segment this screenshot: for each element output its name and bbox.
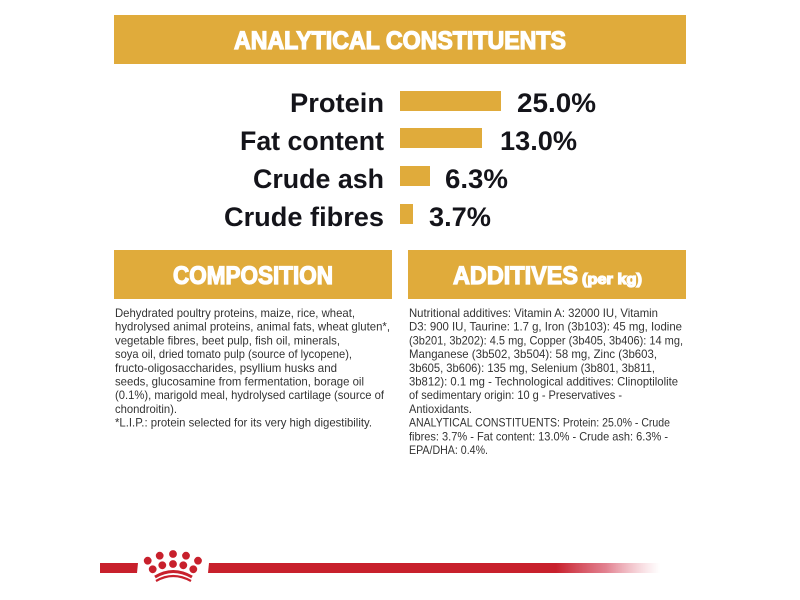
panel: analytical constituents header	[114, 15, 686, 64]
text block: composition: *L.I.P.: protein selected for its very high digestibility.	[115, 417, 372, 430]
icon: royal canin crown logo	[144, 550, 202, 581]
text block: composition: (0.1%), marigold meal, hydrolysed cartilage (source of	[115, 389, 385, 402]
text block: additives: Nutritional additives: Vitamin A: 32000 IU, Vitamin	[409, 307, 658, 320]
text block: additives: Manganese (3b502, 3b504): 58 mg, Zinc (3b603,	[409, 348, 657, 361]
panel: additives header: (per kg)	[582, 271, 642, 288]
panel: additives header	[408, 250, 686, 299]
panel: additives header: ADDITIVES	[453, 262, 578, 290]
panel: composition header	[114, 250, 392, 299]
row: protein: Protein	[290, 88, 384, 118]
row: crude ash	[253, 164, 508, 194]
text block: composition: soya oil, dried tomato pulp (source of lycopene),	[115, 348, 352, 361]
row: crude ash: 6.3%	[445, 164, 508, 194]
text block: additives: fibres: 3.7% - Fat content: 13.0% - Crude ash: 6.3% -	[409, 430, 668, 443]
text block: additives: ANALYTICAL CONSTITUENTS: Protein: 25.0% - Crude	[409, 417, 670, 430]
text block: composition: seeds, glucosamine from fermentation, borage oil	[115, 376, 364, 388]
text block: additives: Antioxidants.	[409, 403, 472, 416]
text block: composition: vegetable fibres, beet pulp, fish oil, minerals,	[115, 334, 340, 347]
row: protein	[290, 88, 596, 118]
text block: composition: chondroitin).	[115, 403, 177, 416]
row: crude ash: Crude ash	[253, 164, 384, 194]
text block: additives: (3b201, 3b202): 4.5 mg, Copper (3b405, 3b406): 14 mg,	[409, 334, 683, 347]
row: protein: 25.0%	[517, 88, 596, 118]
text block: composition: Dehydrated poultry proteins, maize, rice, wheat,	[115, 307, 355, 320]
row: fat content: 13.0%	[500, 126, 577, 156]
row: fat content	[240, 126, 577, 156]
row: crude fibres: 3.7%	[429, 202, 491, 232]
text block: additives: of sedimentary origin: 10 g - Preservatives -	[409, 389, 622, 402]
panel: analytical constituents header: ANALYTICAL CONSTITUENTS	[234, 27, 566, 55]
row: crude fibres: Crude fibres	[224, 202, 384, 232]
text block: additives	[409, 307, 683, 457]
footer stripe: left	[100, 563, 138, 573]
text block: composition: fructo-oligosaccharides, psyllium husks and	[115, 362, 337, 375]
text block: composition	[115, 307, 390, 430]
panel: composition header: COMPOSITION	[173, 262, 333, 290]
text block: additives: EPA/DHA: 0.4%.	[409, 444, 488, 457]
text block: additives: 3b605, 3b606): 135 mg, Selenium (3b801, 3b811,	[409, 362, 655, 375]
footer stripe: right	[208, 563, 660, 573]
row: crude fibres	[224, 202, 491, 232]
bar chart: analytical constituents	[224, 88, 596, 232]
row: fat content: Fat content	[240, 126, 384, 156]
text block: composition: hydrolysed animal proteins, animal fats, wheat gluten*,	[115, 321, 390, 334]
text block: additives: D3: 900 IU, Taurine: 1.7 g, Iron (3b103): 45 mg, Iodine	[409, 321, 682, 334]
text block: additives: 3b812): 0.1 mg - Technological additives: Clinoptilolite	[409, 376, 678, 388]
